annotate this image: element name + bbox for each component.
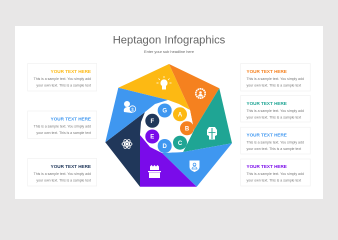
panel: right card blue (241, 127, 310, 154)
circle C: C (178, 141, 183, 147)
icon: podium audience (148, 165, 161, 178)
title: Heptagon Infographics (113, 34, 226, 46)
icon: shield user (190, 160, 200, 172)
icon: atom (122, 139, 132, 149)
segment: left blue (105, 88, 168, 142)
panel: left card yellow: YOUR TEXT HERE (51, 69, 91, 74)
segment: teal (183, 88, 232, 152)
panel: left card yellow: your own text. This is a sample text (36, 84, 91, 88)
circle E: E (150, 135, 154, 141)
icon: robot head (207, 127, 217, 140)
icon: person with coin: $ (131, 107, 134, 112)
panel: right card orange: your own text. This is a sample text (246, 84, 301, 88)
panel: left card navy (28, 158, 97, 186)
panel: right card orange (241, 64, 310, 91)
panel: right card purple: YOUR TEXT HERE (246, 164, 287, 169)
panel: left card navy: your own text. This is a sample text (36, 178, 91, 182)
panel: left card yellow (28, 64, 97, 91)
panel: left card navy: YOUR TEXT HERE (51, 164, 91, 169)
panel: right card teal: your own text. This is a sample text (246, 116, 301, 120)
panel: left card blue: your own text. This is a sample text (36, 131, 91, 135)
panel: left card blue: YOUR TEXT HERE (51, 116, 91, 122)
panel: left card navy: This is a sample text. You simply add (34, 172, 91, 176)
panel: right card teal: YOUR TEXT HERE (246, 101, 287, 106)
segment: navy (105, 112, 145, 187)
panel: left card blue (28, 111, 97, 138)
icon: lightbulb (156, 76, 172, 90)
panel: right card blue: YOUR TEXT HERE (246, 132, 287, 138)
circle F: F (150, 119, 154, 125)
panel: right card purple: your own text. This is a sample text (246, 178, 301, 182)
segment: orange (169, 64, 219, 130)
segment: purple (140, 135, 197, 187)
panel: white slide (15, 26, 323, 199)
circle A: A (178, 112, 183, 118)
panel: right card purple: This is a sample text. You simply add (246, 172, 304, 176)
circle D: D (163, 144, 168, 150)
panel: left card blue: This is a sample text. You simply add (34, 124, 91, 128)
panel: right card teal (241, 96, 310, 122)
panel: right card purple (241, 159, 310, 186)
segment: right blue (162, 143, 232, 187)
panel: right card teal: This is a sample text. You simply add (246, 109, 304, 113)
circle B: B (185, 126, 190, 132)
subtitle: Enter your sub headline here (144, 49, 194, 54)
circle G: G (162, 109, 167, 115)
panel: right card blue: your own text. This is a sample text (246, 147, 301, 151)
panel: right card orange: YOUR TEXT HERE (246, 69, 287, 74)
inner white heptagon (140, 100, 194, 153)
panel: right card blue: This is a sample text. You simply add (246, 140, 304, 144)
panel: left card yellow: This is a sample text. You simply add (34, 77, 91, 81)
icon: gear person (196, 89, 205, 98)
heptagon chart (105, 64, 232, 187)
segment: yellow (118, 64, 190, 110)
panel: right card orange: This is a sample text. You simply add (246, 77, 304, 81)
